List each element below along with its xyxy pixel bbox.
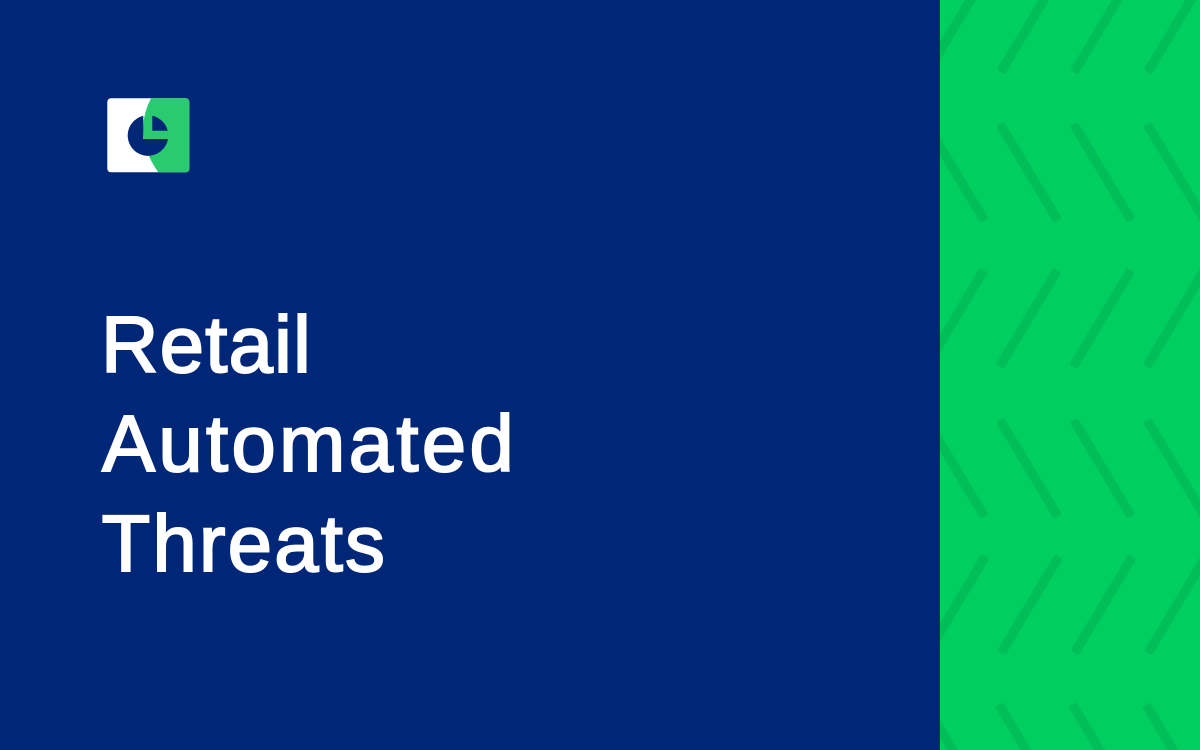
title: Threats [102, 499, 387, 588]
title: Retail [101, 300, 312, 388]
title: Automated [102, 399, 517, 488]
panel: green chevron pattern band [940, 0, 1200, 750]
title [100, 300, 517, 588]
icon: pie chart logo [107, 98, 190, 172]
